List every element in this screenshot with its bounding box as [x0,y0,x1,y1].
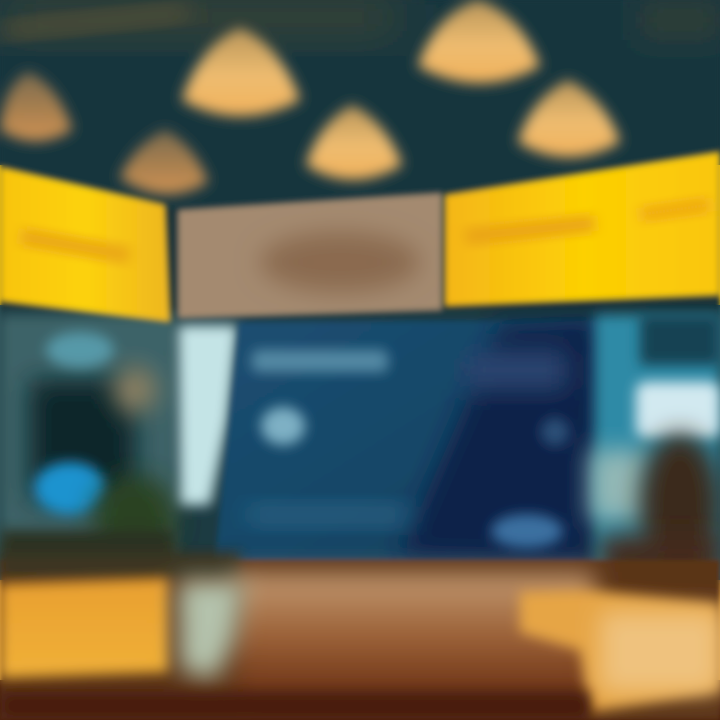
lamp 5 [518,80,620,157]
yellow banner right [445,152,720,306]
tan central sign [178,193,442,318]
left window panel [0,315,177,575]
right window [590,315,720,580]
lamp 2 [182,28,300,116]
pale strip reflection [178,580,245,680]
yellow banner left [0,167,170,322]
panel icon smear [261,407,305,445]
counter bottom shadow [0,692,590,720]
lower wall base [0,310,720,580]
pendant lamps [0,0,620,194]
lamp 4 [306,105,402,180]
right yellow counter [520,590,720,712]
seated figure [640,433,720,577]
pale vertical strip [178,325,238,505]
panel button smear [491,514,563,548]
ceiling background [0,0,720,210]
panel small dot [541,418,569,446]
panel lower text smear [245,505,410,525]
lamp 1 [0,72,72,141]
left yellow counter [0,578,168,678]
blue central panel [215,320,600,562]
dark navy section [400,320,600,560]
floor counter [0,552,720,720]
lamp 3 [418,0,540,83]
panel text smear [462,350,567,390]
lamp 6 [120,130,208,194]
panel heading smear [252,350,388,372]
